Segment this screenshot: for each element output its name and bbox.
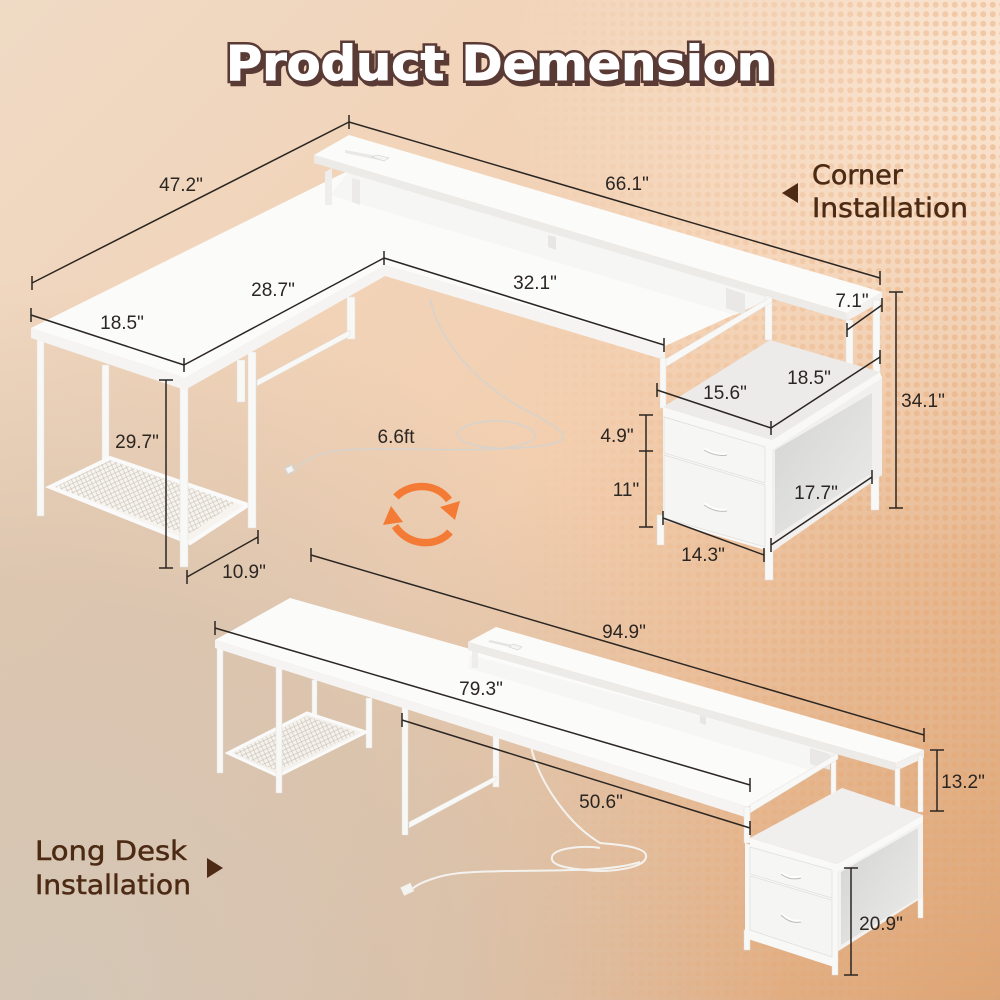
bottom drawer xyxy=(664,455,765,547)
dim 29.7: 29.7" xyxy=(115,432,159,453)
heading: corner: Corner xyxy=(812,160,904,191)
long cabinet side panel xyxy=(837,818,923,952)
title: Product Demension xyxy=(229,39,775,95)
long bottom drawer xyxy=(750,876,832,957)
long cabinet shelf xyxy=(750,788,923,864)
wire mesh shelf xyxy=(50,458,248,543)
long desk front legs xyxy=(217,645,408,835)
main desktop xyxy=(31,170,773,390)
power cord xyxy=(285,298,563,474)
dim 47.2 xyxy=(32,115,349,290)
dim 10.9 xyxy=(187,530,266,584)
file cabinet xyxy=(657,340,882,580)
dim 29.7 xyxy=(115,380,173,568)
top drawer xyxy=(664,417,765,483)
cabinet side panel xyxy=(772,378,882,552)
left section front legs xyxy=(37,338,256,567)
long cabinet legs xyxy=(744,895,923,975)
dim 10.9: 10.9" xyxy=(222,562,266,583)
long riser power strip xyxy=(488,640,518,648)
icon: left arrow xyxy=(782,183,798,203)
label: corner installation xyxy=(782,160,968,224)
cabinet front xyxy=(663,416,772,552)
dim 28.7: 28.7" xyxy=(251,280,295,301)
cabinet shelf xyxy=(663,340,880,440)
long cabinet front xyxy=(745,843,837,968)
long desktop xyxy=(215,598,838,818)
long desk mesh shelf xyxy=(228,713,366,776)
long riser xyxy=(468,627,924,771)
monitor riser xyxy=(314,135,882,321)
dim 15.6 xyxy=(657,383,771,428)
dim 79.3 xyxy=(215,621,750,792)
title: Product Demension xyxy=(226,36,772,92)
dim 18.5 right xyxy=(771,350,880,435)
long desk posts xyxy=(744,753,923,843)
label: long desk installation xyxy=(35,836,223,901)
dim 66.1 xyxy=(349,122,880,285)
dim 50.6: 50.6" xyxy=(579,792,623,813)
long desk power cord xyxy=(402,747,646,894)
dim 14.3 xyxy=(663,511,764,566)
dim 20.9: 20.9" xyxy=(859,914,903,935)
dim 32.1 xyxy=(384,258,664,352)
dim 13.2: 13.2" xyxy=(941,772,985,793)
dim 32.1: 32.1" xyxy=(513,273,557,294)
dim 18.5 right: 18.5" xyxy=(787,368,831,389)
left section back legs xyxy=(102,297,355,475)
dim 47.2: 47.2" xyxy=(159,175,203,196)
dim 34.1: 34.1" xyxy=(901,391,945,412)
dim 7.1 xyxy=(835,291,882,337)
dimensions: long desk xyxy=(215,548,985,975)
title: Product Demension xyxy=(226,36,772,92)
dim 28.7 xyxy=(184,251,384,365)
dim 17.7 xyxy=(771,470,872,552)
dim 94.9 xyxy=(311,548,924,742)
power strip xyxy=(345,150,388,161)
dim 94.9: 94.9" xyxy=(602,622,646,643)
heading: long desk: Long Desk xyxy=(35,836,187,867)
dim 66.1: 66.1" xyxy=(605,174,649,195)
long top drawer xyxy=(750,847,832,898)
right riser posts and cable brace xyxy=(660,296,880,408)
dim 50.6 xyxy=(402,713,750,835)
dim 17.7: 17.7" xyxy=(794,483,838,504)
long desk legs xyxy=(312,680,499,828)
dim 79.3: 79.3" xyxy=(459,679,503,700)
dim 18.5 left xyxy=(31,308,184,372)
dim 18.5 left: 18.5" xyxy=(100,313,144,334)
dim 4.9 and 11: 11" xyxy=(613,480,639,501)
dim 15.6: 15.6" xyxy=(703,383,747,404)
dim 4.9 and 11 xyxy=(600,415,653,527)
long desk cabinet xyxy=(744,788,923,975)
dim 7.1: 7.1" xyxy=(835,291,869,312)
cabinet legs xyxy=(657,470,879,580)
illustration: long desk xyxy=(215,598,924,975)
dimensions: corner desk xyxy=(31,115,945,584)
heading: installation: Installation xyxy=(35,870,191,901)
dim 13.2 xyxy=(930,750,985,811)
dim 20.9 xyxy=(844,868,903,975)
dim 34.1 xyxy=(889,292,945,508)
heading: installation: Installation xyxy=(812,193,968,224)
dim 6.6ft: 6.6ft xyxy=(378,427,415,448)
dim 14.3: 14.3" xyxy=(681,545,725,566)
icon: right arrow xyxy=(207,858,223,878)
icon: rotate arrows xyxy=(383,486,460,543)
dim 4.9 and 11: 4.9" xyxy=(600,426,634,447)
illustration: corner desk xyxy=(31,135,882,580)
